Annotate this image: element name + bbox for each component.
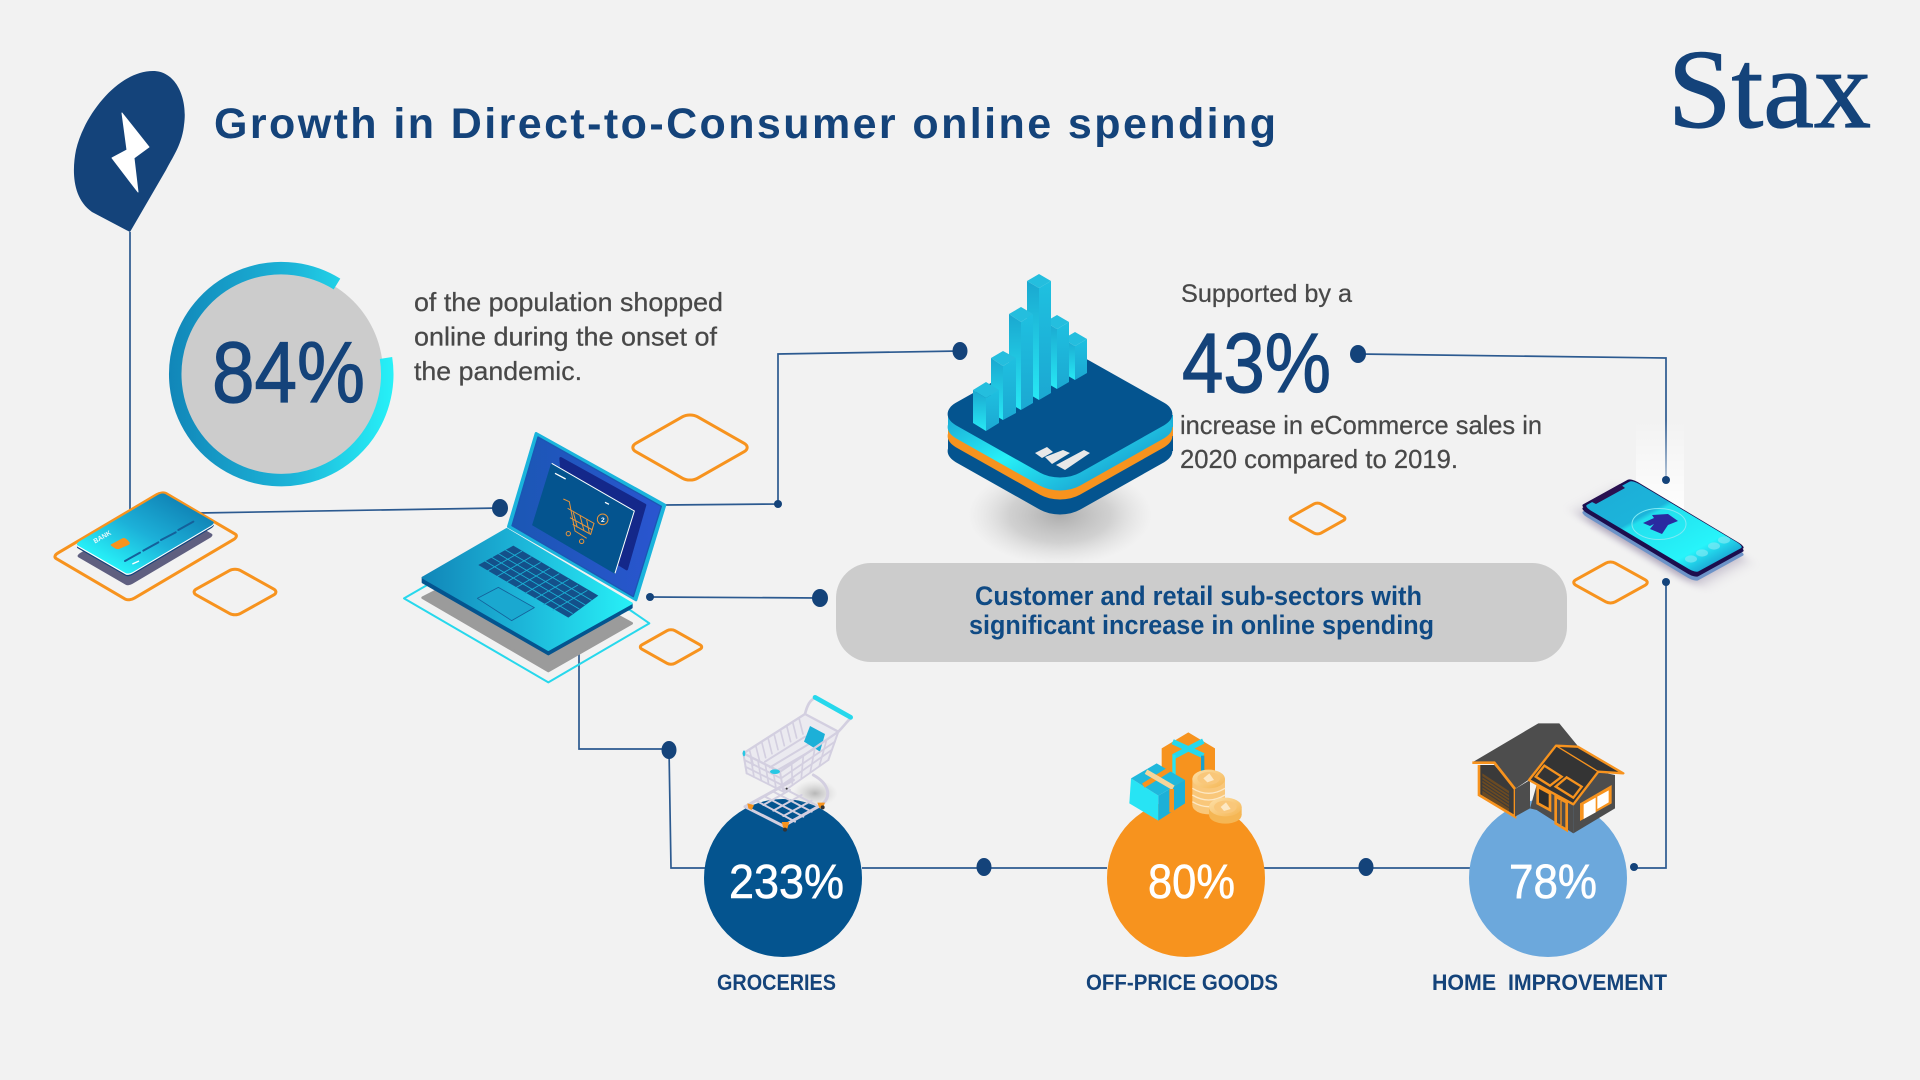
- connector dot: card to laptop: [492, 499, 508, 517]
- stat circle: home improvement 78%: [1469, 799, 1627, 957]
- icon: location pin with lightning bolt: [74, 71, 185, 232]
- text: 43% eCommerce increase: increase in eCommerce sales in: [1180, 410, 1542, 440]
- text: 43% eCommerce increase: Supported by a: [1181, 280, 1352, 308]
- connector dots: bottom row: [662, 741, 1374, 876]
- banner: sub-sectors heading: significant increase in online spending: [969, 610, 1434, 640]
- stat circle: off-price goods 80%: 80%: [1148, 856, 1235, 909]
- text: population shopped online: online during the onset of: [414, 322, 718, 352]
- logo: Stax: Stax: [1668, 28, 1871, 152]
- icon: bar chart on platform: [936, 274, 1184, 565]
- connector dot: 43%: [1350, 345, 1366, 363]
- label: home improvement: HOME IMPROVEMENT: [1432, 970, 1668, 995]
- stat: 84% ring: 84%: [212, 325, 365, 421]
- stat circle: off-price goods 80%: [1107, 799, 1265, 957]
- icon: laptop: [404, 433, 665, 682]
- icon: shopping cart: [743, 697, 851, 832]
- text: population shopped online: [414, 287, 723, 386]
- text: population shopped online: of the population shopped: [414, 287, 723, 317]
- connector lines: [130, 232, 1666, 868]
- icon: credit card: [52, 491, 239, 601]
- icon: house: [1472, 723, 1623, 833]
- icon: smartphone: [1578, 420, 1746, 585]
- text: 43% eCommerce increase: 43%: [1182, 316, 1331, 410]
- text: population shopped online: the pandemic.: [414, 356, 582, 386]
- decorative diamond: [628, 412, 752, 482]
- banner: sub-sectors heading: Customer and retail sub-sectors with: [975, 581, 1422, 611]
- decorative diamond: [638, 628, 704, 666]
- icon: laptop: 2: [601, 517, 605, 524]
- decorative diamond: [1288, 502, 1347, 535]
- label: groceries: GROCERIES: [717, 970, 836, 995]
- stat circle: groceries 233%: [704, 799, 862, 957]
- decorative diamond: [1571, 560, 1650, 604]
- icon: gift boxes and coins: [1129, 732, 1242, 824]
- stat circle: groceries 233%: 233%: [729, 856, 844, 909]
- decorative diamond: [191, 568, 279, 616]
- banner: sub-sectors heading: [836, 563, 1567, 662]
- label: off-price goods: OFF-PRICE GOODS: [1086, 970, 1278, 995]
- title: Growth in Direct-to-Consumer online spending: [214, 100, 1276, 148]
- stat circle: home improvement 78%: 78%: [1509, 856, 1597, 909]
- stat: 84% ring: [175, 268, 387, 480]
- connector dots: phone: [1630, 476, 1670, 871]
- icon: credit card: BANK: [92, 530, 113, 545]
- text: 43% eCommerce increase: [1180, 280, 1542, 474]
- text: 43% eCommerce increase: 2020 compared to 2019.: [1180, 444, 1458, 474]
- connector dots: laptop: [646, 342, 968, 607]
